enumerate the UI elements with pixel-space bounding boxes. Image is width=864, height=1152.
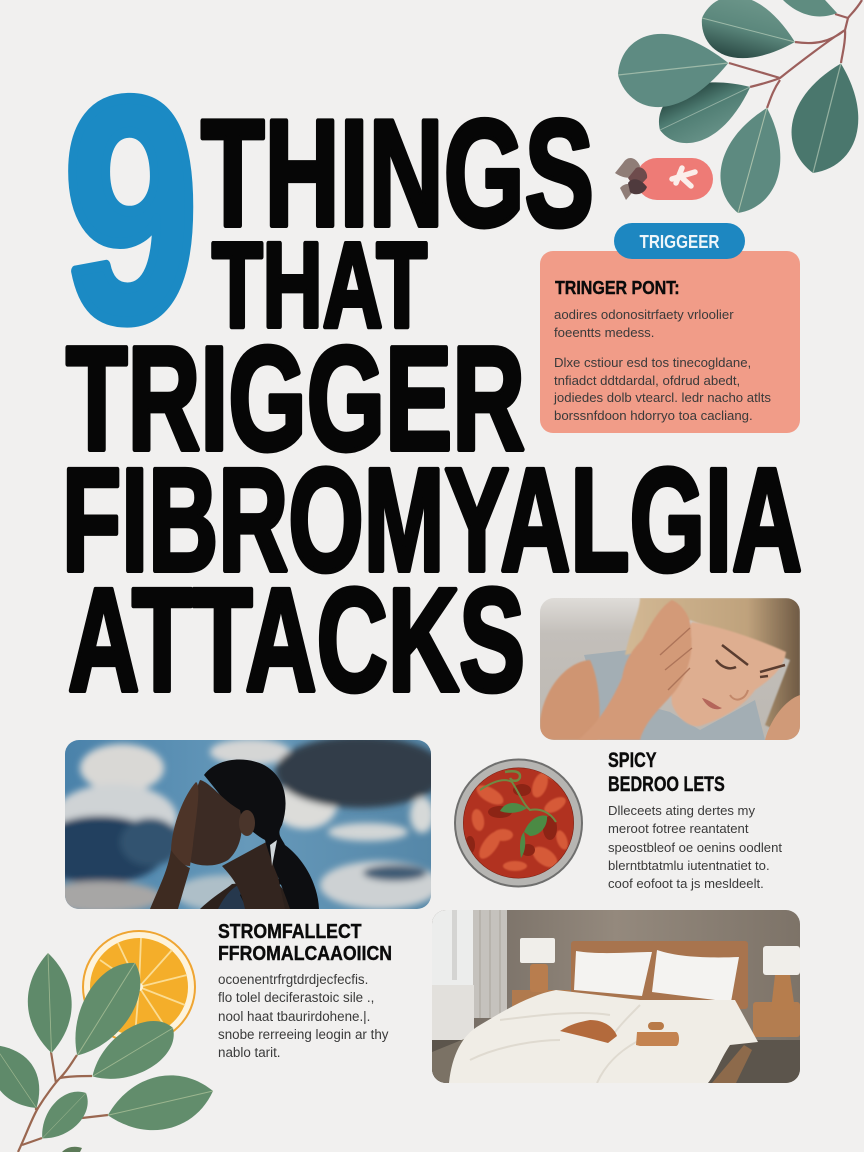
pill symbol	[672, 168, 695, 186]
text block: spicy	[608, 749, 782, 891]
photo: bedroom	[432, 910, 800, 1083]
photo: woman against stormy sky	[65, 740, 431, 909]
illustration: bowl of spicy food	[454, 758, 583, 888]
title: THAT	[212, 218, 427, 352]
body: spicy: coof eofoot ta js mesldeelt.	[608, 876, 764, 891]
face	[190, 780, 242, 866]
heading: storm: FFROMALCAAOIICN	[218, 943, 392, 965]
body: spicy	[608, 803, 782, 891]
heading: storm: STROMFALLECT	[218, 921, 362, 943]
shoulders	[200, 884, 290, 909]
body: storm: flo tolel deciferastoic sile .,	[218, 990, 374, 1005]
heading: trigger point: TRINGER PONT:	[555, 278, 680, 298]
left arm	[540, 660, 600, 740]
bed frame	[712, 1045, 752, 1083]
curtain	[473, 910, 507, 1018]
body: intro	[554, 307, 734, 340]
headboard	[571, 941, 748, 1009]
icon: plaster cross	[615, 158, 647, 200]
photo: woman holding head	[540, 598, 800, 740]
hand	[578, 600, 692, 740]
body: detail	[554, 355, 771, 422]
body: spicy: blerntbtatmlu iutentnatiet to.	[608, 858, 770, 873]
body: spicy: meroot fotree reantatent	[608, 821, 748, 836]
body: detail: jodiedes dolb vtearcl. ledr nacho atlts	[554, 390, 771, 405]
window	[432, 910, 476, 985]
left lamp and table	[512, 990, 570, 1006]
hand	[171, 782, 198, 866]
hair	[204, 760, 319, 909]
face	[671, 622, 786, 726]
features	[716, 645, 785, 677]
text block: storm	[218, 921, 392, 1060]
body: intro: aodires odonositrfaety vrloolier	[554, 307, 734, 322]
right shoulder	[765, 695, 800, 740]
heading: spicy: BEDROO LETS	[608, 773, 725, 796]
heading: spicy: SPICY	[608, 749, 657, 772]
icon: bandage pill	[615, 158, 713, 200]
clouds	[65, 740, 431, 909]
title: THINGS	[201, 88, 594, 258]
body: detail: tnfiadct ddtdardal, ofdrud abedt,	[554, 372, 740, 388]
pillows	[574, 951, 652, 996]
badge: trigger pill: TRIGGEER	[640, 232, 720, 252]
heading: spicy	[608, 749, 725, 796]
body: detail: Dlxe cstiour esd tos tinecogldane,	[554, 355, 751, 370]
leaves: top right branch	[614, 0, 864, 221]
body: storm: snobe rerreeing leogin ar thy	[218, 1027, 388, 1042]
title: TRIGGER	[66, 316, 525, 482]
hair	[625, 598, 800, 730]
heading: storm	[218, 921, 392, 965]
body: intro: foeentts medess.	[554, 325, 654, 340]
body: storm	[218, 972, 388, 1060]
top	[584, 650, 765, 740]
text block: trigger point	[554, 278, 771, 422]
body: detail: borssnfdoon hdorryo toa cacliang.	[554, 408, 753, 422]
body: storm: nablo tarit.	[218, 1045, 281, 1060]
icon: orange slice	[82, 930, 196, 1044]
cabinet	[432, 985, 474, 1040]
leaves: bottom left branch	[0, 950, 219, 1152]
body: spicy: speostbleof oe oenins oodlent	[608, 840, 782, 855]
body: storm: nool haat tbaurirdohene.|.	[218, 1009, 370, 1024]
title	[62, 33, 802, 722]
title numeral 9: 9	[64, 33, 198, 386]
herb garnish	[480, 780, 556, 822]
title: ATTACKS	[68, 558, 525, 722]
towels	[560, 1020, 617, 1043]
body: storm: ocoenentrfrgtdrdjecfecfis.	[218, 972, 368, 987]
badge: trigger pill	[614, 223, 745, 259]
neck	[222, 842, 280, 909]
right lamp and table	[753, 1002, 800, 1037]
body: spicy: Dlleceets ating dertes my	[608, 803, 755, 818]
panel: trigger point card	[540, 251, 800, 433]
duvet	[449, 990, 758, 1083]
